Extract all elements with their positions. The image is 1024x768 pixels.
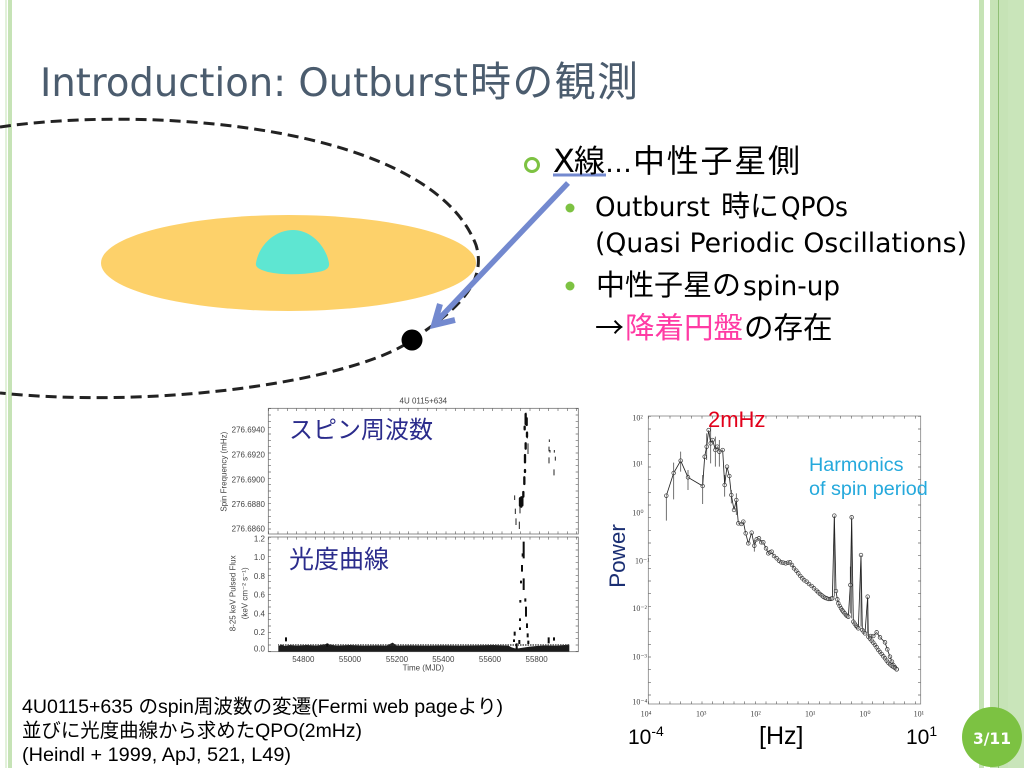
axis labels: 10² <box>632 414 643 423</box>
axis labels: 10⁴ <box>641 710 652 719</box>
power spectrum curve <box>666 430 897 669</box>
caption: 4U0115+635 のspin周波数の変遷(Fermi web pageより) <box>22 696 503 718</box>
chart: power spectrum <box>632 414 925 719</box>
neutron star dome <box>256 230 329 274</box>
label: 2mHz: 2mHz <box>708 407 765 432</box>
axis labels: 10⁻⁴ <box>632 697 648 706</box>
page number badge <box>962 707 1022 767</box>
bullet: X-ray heading: 中性子星側 <box>633 136 800 182</box>
axis labels: 55400 <box>432 655 455 664</box>
chart: spin frequency and light curve <box>219 396 578 672</box>
x axis label: 10^-4: -4 <box>651 723 664 739</box>
sub-bullet: QPOs <box>566 183 967 259</box>
axis labels: 55600 <box>479 655 502 664</box>
tick marks <box>268 408 578 652</box>
axis labels: 10¹ <box>805 710 816 719</box>
sub-bullet: spin-up: spin-up <box>743 271 840 302</box>
axis labels: 276.6860 <box>232 524 266 533</box>
axis labels: 10⁰ <box>632 508 644 517</box>
sub-bullet: spin-up: → <box>595 305 624 347</box>
x axis label: Hz: [Hz] <box>759 722 803 750</box>
label: spin frequency: スピン周波数 <box>289 410 433 445</box>
bullet list <box>526 136 967 347</box>
companion dot <box>402 330 422 350</box>
caption <box>22 696 503 766</box>
axis labels: Time (MJD) <box>403 663 444 672</box>
bullet: X-ray heading: 線 <box>574 136 605 181</box>
axis labels: 0.4 <box>254 609 266 618</box>
light curve data <box>278 643 569 652</box>
axis labels: 55200 <box>386 655 409 664</box>
sub-bullet: QPOs: 時に <box>721 183 779 225</box>
label: light curve: 光度曲線 <box>289 540 389 576</box>
axis labels: 10⁰ <box>859 710 871 719</box>
axis labels: 0.2 <box>254 628 266 637</box>
axis labels: 10¹ <box>914 710 925 719</box>
axis labels: 276.6880 <box>232 500 266 509</box>
label: harmonics: of spin period <box>809 478 928 500</box>
accretion disk <box>101 215 476 311</box>
bullet: X-ray heading <box>526 136 800 182</box>
tick marks <box>648 416 921 704</box>
x axis label: 10^1: 1 <box>929 723 937 739</box>
axis labels: 1.0 <box>254 553 266 562</box>
axis labels: 276.6900 <box>232 475 266 484</box>
right sidebar stripes <box>979 0 1024 768</box>
axis labels <box>632 414 925 719</box>
axis labels: 276.6920 <box>232 451 266 460</box>
caption: (Heindl + 1999, ApJ, 521, L49) <box>22 744 291 766</box>
bullet: X-ray heading: … <box>605 149 632 179</box>
sub-bullet: QPOs: Outburst <box>595 192 710 223</box>
axis labels: 55800 <box>526 655 548 664</box>
axis labels: 0.6 <box>254 591 266 600</box>
axis labels: 10⁻¹ <box>635 556 650 565</box>
axis labels: 55000 <box>339 655 362 664</box>
title <box>40 48 638 108</box>
dashed orbit <box>0 119 478 398</box>
sub-bullet: QPOs: (Quasi Periodic Oscillations) <box>595 228 967 259</box>
sub-bullet: spin-up: の存在 <box>744 305 833 347</box>
arrow from X-ray text to companion <box>434 175 606 325</box>
spin frequency data <box>515 413 555 529</box>
axis labels: 54800 <box>292 655 315 664</box>
axis labels: (keV cm⁻² s⁻¹) <box>240 567 249 619</box>
axis labels: 1.2 <box>254 535 266 544</box>
x axis label: 10^1: 10 <box>906 726 929 749</box>
axis labels: 10⁻² <box>632 604 648 613</box>
chart title: 4U 0115+634 <box>400 396 448 405</box>
sub-bullet: spin-up: 中性子星の <box>596 262 741 304</box>
axis labels: 10³ <box>696 710 707 719</box>
axis labels: 10¹ <box>632 460 643 469</box>
diagram: binary system <box>0 119 606 398</box>
frames <box>268 408 578 534</box>
left sidebar stripes <box>5 0 12 768</box>
frame <box>648 416 921 704</box>
axis labels: 0.0 <box>254 644 266 653</box>
bullet: X-ray heading: X <box>553 142 575 180</box>
lower dense branch <box>868 637 897 669</box>
axis labels <box>219 426 548 672</box>
title: Introduction: Outburst <box>40 61 468 106</box>
axis labels: 276.6940 <box>232 426 266 435</box>
sub-bullet: spin-up: 降着円盤 <box>625 305 743 347</box>
caption: 並びに光度曲線から求めたQPO(2mHz) <box>22 720 362 742</box>
y axis label: power: Power <box>605 524 630 588</box>
page number badge: 3/11 <box>973 729 1011 748</box>
axis labels: 10⁻³ <box>632 652 648 661</box>
axis labels: 10² <box>750 710 761 719</box>
label: harmonics: Harmonics <box>809 454 904 476</box>
axis labels: 8-25 keV Pulsed Flux <box>228 555 237 631</box>
title: 時の観測 <box>470 48 638 108</box>
sub-bullet: QPOs: QPOs <box>781 192 848 223</box>
sub-bullet: spin-up <box>566 262 840 347</box>
x axis label: 10^-4: 10 <box>628 726 651 749</box>
error bars <box>666 423 868 633</box>
axis labels: 0.8 <box>254 572 266 581</box>
axis labels: Spin Frequency (mHz) <box>219 431 228 512</box>
